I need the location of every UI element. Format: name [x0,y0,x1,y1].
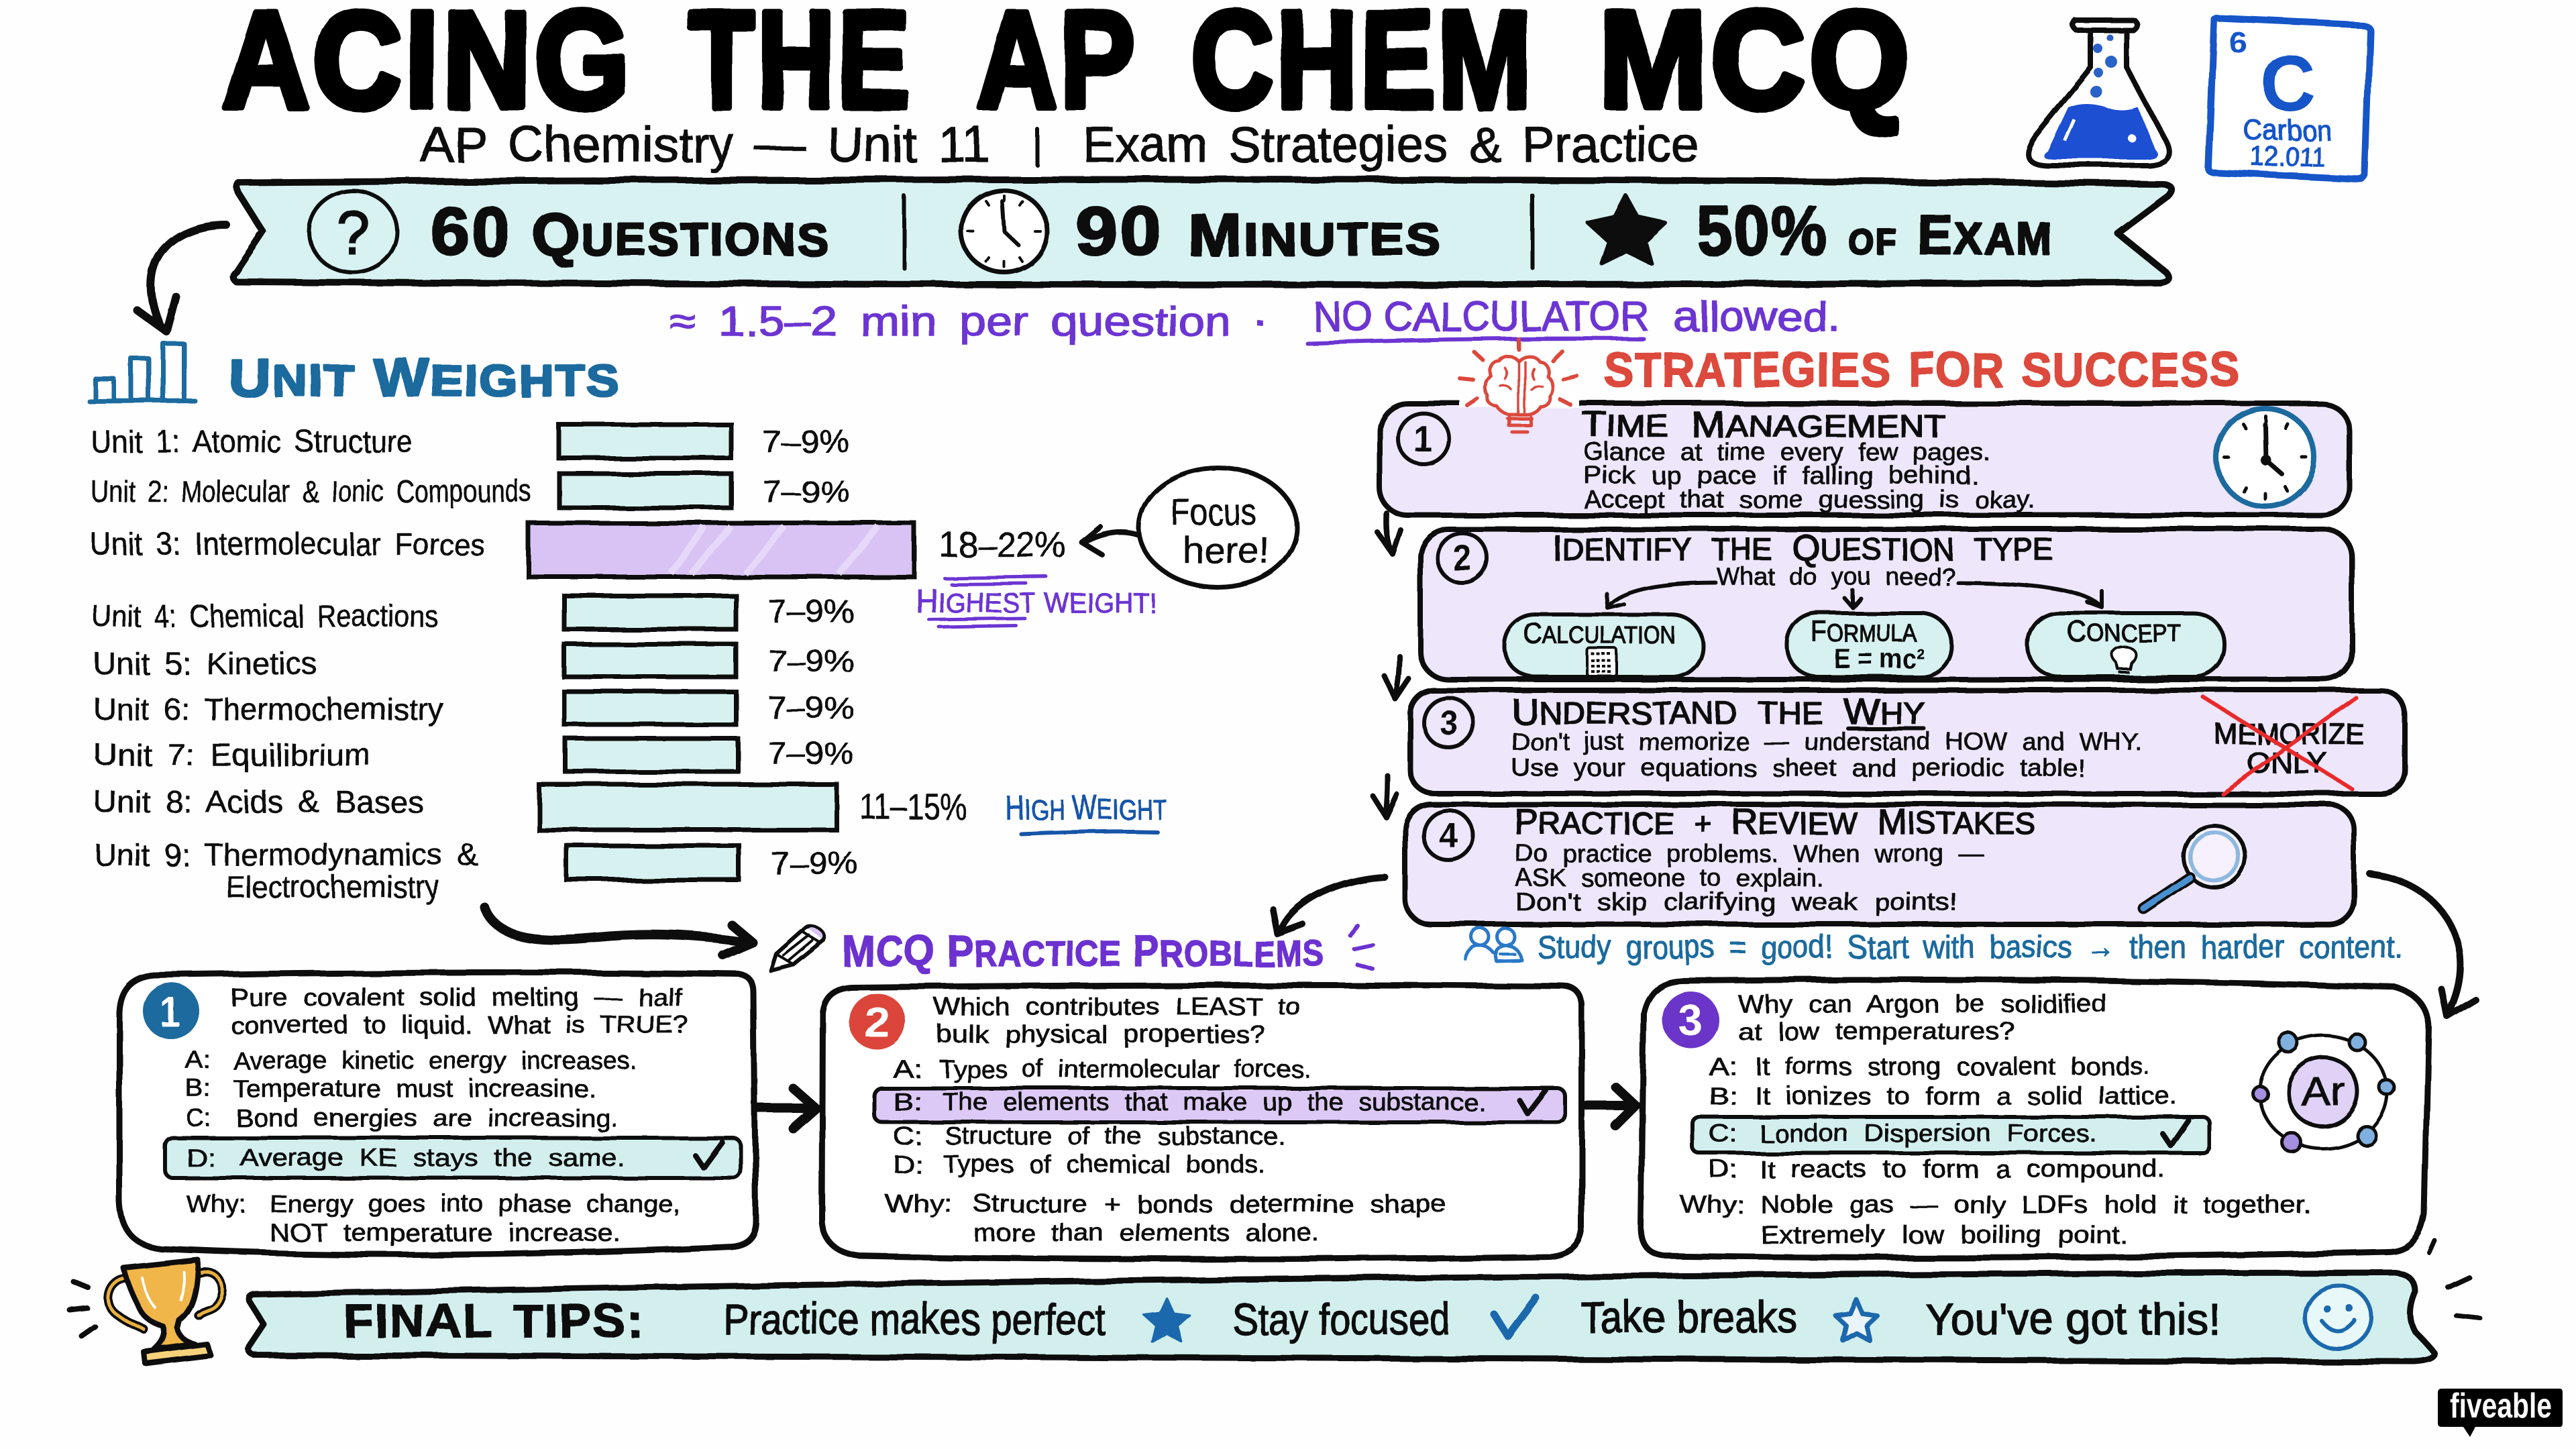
callout: focus here bubble [1138,468,1297,587]
icon: calculator [1587,648,1617,676]
row: unit 9: Electrochemistry [226,869,439,904]
options C and D [893,1122,1285,1178]
question text: Pure covalent solid melting — half [230,983,682,1011]
icon: argon atom [2252,1033,2394,1152]
stat: 90 minutes: 90 MINUTES [1075,193,1442,270]
banner: exam stats [233,179,2171,284]
subtitle [421,117,1699,172]
icon: brain lightbulb [1460,339,1576,432]
note: study groups: Study groups = good! Start with basics → then harder content. [1537,930,2403,965]
row: unit 7: 7–9% [768,736,854,771]
icon: pencil [771,926,824,971]
icon: question mark [309,191,397,272]
explanation [1680,1191,2311,1248]
stat: 50 percent of exam: 50% OF EXAM [1697,193,2053,269]
pill: calculation: CALCULATION [1523,617,1676,650]
arrow: step 4 to problem 3 [2369,873,2475,1016]
label: high weight: HIGH WEIGHT [1005,789,1167,826]
icon: trophy [70,1260,222,1363]
explanation: Noble gas — only LDFs hold it together. [1760,1191,2311,1218]
explanation: Why: [1680,1191,1744,1218]
icon: star [1588,196,1665,263]
options A and B: It forms strong covalent bonds. [1755,1053,2151,1080]
logo: fiveable [2438,1387,2563,1437]
explanation [885,1190,1446,1246]
number 2: 2 [1453,538,1472,578]
badge 1 [143,983,199,1039]
row: unit 3 highlighted: Unit 3: Intermolecular Forces [91,527,484,561]
icon: light bulb [2112,647,2135,676]
text block [1584,438,2035,513]
text block: Glance at time every few pages. [1584,438,1990,466]
pill: formula: E = mc² [1834,643,1925,674]
icon: bar chart [89,343,195,401]
tip: you have got this: You've got this! [1925,1294,2220,1344]
heading: mcq practice problems: MCQ PRACTICE PROBLEMS [842,926,1325,975]
correct answer [874,1088,1565,1122]
text block: Use your equations sheet and periodic table! [1511,754,2085,782]
panel: problem 3 [1641,979,2428,1258]
correct answer [165,1138,741,1178]
correct answer [1693,1117,2210,1153]
icon: outline star [1835,1299,1877,1340]
icon: periodic table carbon tile: Carbon [2243,114,2331,146]
badge 2: 2 [865,998,890,1046]
arrow: problem 2 to 3 [1587,1087,1635,1126]
panel: problem 1 [119,972,756,1254]
row: unit 1 [91,424,850,459]
icon: magnifying glass [2143,826,2245,908]
arrow: step 3 to 4 [1373,775,1397,817]
row: unit 1: Unit 1: Atomic Structure [91,424,413,459]
correct answer: B: [893,1088,922,1116]
explanation: Why: [186,1190,246,1218]
icon: periodic table carbon tile: 12.011 [2251,140,2324,172]
question text: bulk physical properties? [936,1020,1265,1048]
number 3: 3 [1440,704,1458,743]
options A and B: A: [1709,1053,1737,1080]
heading: UNDERSTAND THE WHY [1511,690,1925,732]
row: unit 9: 7–9% [771,846,859,881]
correct answer: C: [1709,1120,1737,1147]
question text: Which contributes LEAST to [934,993,1301,1020]
panel: problem 2 [822,985,1582,1259]
icon: periodic table carbon tile: C [2261,40,2316,128]
correct answer: London Dispersion Forces. [1759,1120,2097,1147]
icon: periodic table carbon tile [2208,18,2370,179]
note: time per question [669,294,1840,345]
explanation [186,1190,680,1246]
subtitle: AP Chemistry — Unit 11 [421,117,990,172]
explanation: Structure + bonds determine shape [973,1190,1446,1218]
answer options: Average kinetic energy increases. [233,1046,637,1074]
question text [230,983,688,1038]
row: unit 1: 7–9% [762,424,850,459]
option D: It reacts to form a compound. [1759,1155,2165,1183]
panel: strategy 2 identify question type [1420,526,2352,680]
callout: focus here bubble: Focus [1171,490,1256,533]
arrow: step 2 to 3 [1385,656,1409,699]
pill: formula: FORMULA [1811,615,1917,648]
arrow: problem 1 to 2 [758,1088,816,1128]
heading: strategies for success: STRATEGIES FOR SUCCESS [1604,343,2241,397]
row: unit 2: Unit 2: Molecular & Ionic Compounds [91,474,532,508]
number 4 [1424,810,1473,860]
explanation: NOT temperature increase. [270,1219,621,1246]
explanation: Why: [885,1190,953,1218]
correct answer: The elements that make up the substance. [943,1088,1485,1116]
note: time per question: ≈ 1.5–2 min per question · [669,299,1269,345]
option D: D: [1709,1155,1737,1183]
label: final tips: FINAL TIPS: [343,1295,645,1347]
option A: A: [893,1055,922,1083]
options A and B: It ionizes to form a solid lattice. [1755,1082,2178,1110]
text block [1515,840,1984,916]
text block [1511,728,2142,782]
tip: practice: Practice makes perfect [723,1294,1105,1344]
arrow: focus to unit 3 [1081,527,1138,554]
heading: unit weights [89,343,621,407]
options C and D: D: [893,1150,922,1178]
question text [934,993,1301,1048]
title [221,0,1913,137]
note: time per question: NO CALCULATOR [1313,294,1650,340]
options C and D: Structure of the substance. [945,1122,1285,1150]
row: unit 9 [94,837,859,904]
icon: blue star [1144,1298,1189,1342]
tip: stay focused: Stay focused [1232,1294,1450,1344]
options A and B: B: [1709,1082,1737,1110]
label: highest weight: HIGHEST WEIGHT! [916,582,1157,620]
icon: question mark: ? [337,199,369,267]
pill: calculation [1504,614,1703,677]
number 1 [1398,413,1449,464]
row: unit 6: 7–9% [768,690,854,725]
panel: strategy 3 understand the why [1410,690,2405,794]
icon: clock [961,191,1047,272]
panel: strategy 1 time management [1379,394,2349,515]
icon: argon atom: Ar [2302,1069,2346,1114]
text block: Don't skip clarifying weak points! [1515,888,1957,916]
answer options: A: [186,1046,211,1074]
number 1: 1 [1413,417,1432,460]
arrow: step 1 to 2 [1378,513,1401,554]
options A and B [1709,1053,2178,1110]
callout: focus here bubble: here! [1183,529,1269,571]
icon: periodic table carbon tile: 6 [2229,26,2247,59]
stamp: memorize only crossed out: ONLY [2247,747,2327,780]
question text: Why can Argon be solidified [1738,990,2107,1018]
text block: ASK someone to explain. [1515,864,1823,892]
logo: fiveable: fiveable [2450,1387,2552,1426]
row: unit 7: Unit 7: Equilibrium [94,737,371,772]
stamp: memorize only crossed out: MEMORIZE [2214,718,2364,751]
stat: 60 questions: 60 QUESTIONS [431,193,830,270]
row: unit 8 [94,784,967,830]
badge 1: 1 [160,987,180,1036]
heading: IDENTIFY THE QUESTION TYPE [1552,526,2053,568]
explanation: more than elements alone. [973,1219,1320,1246]
text block: Don't just memorize — understand HOW and WHY. [1511,728,2142,755]
arrows: branches to types [1606,582,2102,608]
row: unit 4 [92,594,854,633]
row: unit 5: Unit 5: Kinetics [93,646,317,681]
answer options: B: [186,1075,211,1102]
options C and D: Types of chemical bonds. [943,1150,1265,1178]
icon: clock [2216,409,2314,506]
number 3 [1424,698,1473,747]
row: unit 6: Unit 6: Thermochemistry [94,692,443,727]
arrow: step 4 to practice problems [1273,877,1385,934]
options C and D: C: [893,1122,922,1150]
arrow: unit weights to practice problems [484,907,753,955]
row: unit 5 [93,643,854,681]
explanation: Energy goes into phase change, [270,1190,680,1218]
row: unit 8: 11–15% [860,787,967,827]
icon: flask [2028,20,2169,165]
number 4: 4 [1439,816,1458,855]
heading: TIME MANAGEMENT [1582,402,1945,445]
answer options: Bond energies are increasing. [235,1104,618,1132]
row: unit 4: Unit 4: Chemical Reactions [92,598,438,633]
answer options: Temperature must increasine. [233,1075,596,1102]
panel: strategy 4 practice and review [1405,800,2354,924]
pill: concept [2028,613,2224,677]
pill: formula [1787,613,1951,677]
heading: PRACTICE + REVIEW MISTAKES [1514,800,2035,842]
number 2 [1438,533,1487,583]
badge 3 [1662,991,1719,1048]
text: what do you need: What do you need? [1717,563,1955,590]
row: unit 6 [94,690,854,727]
stamp: memorize only crossed out [2204,698,2364,794]
explanation: Extremely low boiling point. [1760,1221,2127,1248]
row: unit 5: 7–9% [768,643,854,678]
banner: final tips [249,1241,2479,1362]
tip: take breaks: Take breaks [1580,1292,1797,1342]
option A: Types of intermolecular forces. [939,1055,1311,1083]
badge 2 [849,994,906,1050]
answer options: C: [186,1104,211,1132]
heading: unit weights: UNIT WEIGHTS [228,347,621,407]
row: unit 4: 7–9% [768,594,854,629]
question text [1738,990,2107,1045]
row: unit 3 highlighted [91,523,1065,577]
icon: smiley [2304,1285,2371,1348]
question text: converted to liquid. What is TRUE? [230,1011,688,1038]
row: unit 8: Unit 8: Acids & Bases [94,784,423,819]
subtitle: Exam Strategies & Practice [1083,117,1699,172]
correct answer: Average KE stays the same. [240,1144,625,1171]
row: unit 7 [94,736,854,772]
note: time per question: allowed. [1674,294,1840,340]
question text: at low temperatures? [1738,1018,2015,1045]
text block: Accept that some guessing is okay. [1584,486,2035,513]
text block: Do practice problems. When wrong — [1515,840,1984,867]
icon: people [1466,928,1521,961]
icon: checkmark [1495,1298,1536,1336]
row: unit 2: 7–9% [762,474,850,508]
row: unit 9: Unit 9: Thermodynamics & [94,837,478,872]
arrow: banner to unit weights [138,225,226,331]
correct answer: D: [186,1144,215,1171]
answer options [186,1046,637,1132]
row: unit 3 highlighted: 18–22% [939,525,1065,565]
pill: concept: CONCEPT [2067,615,2181,648]
chart: unit weights bars [91,424,1065,904]
badge 3: 3 [1678,996,1703,1044]
text block: Pick up pace if falling behind. [1584,462,1978,489]
